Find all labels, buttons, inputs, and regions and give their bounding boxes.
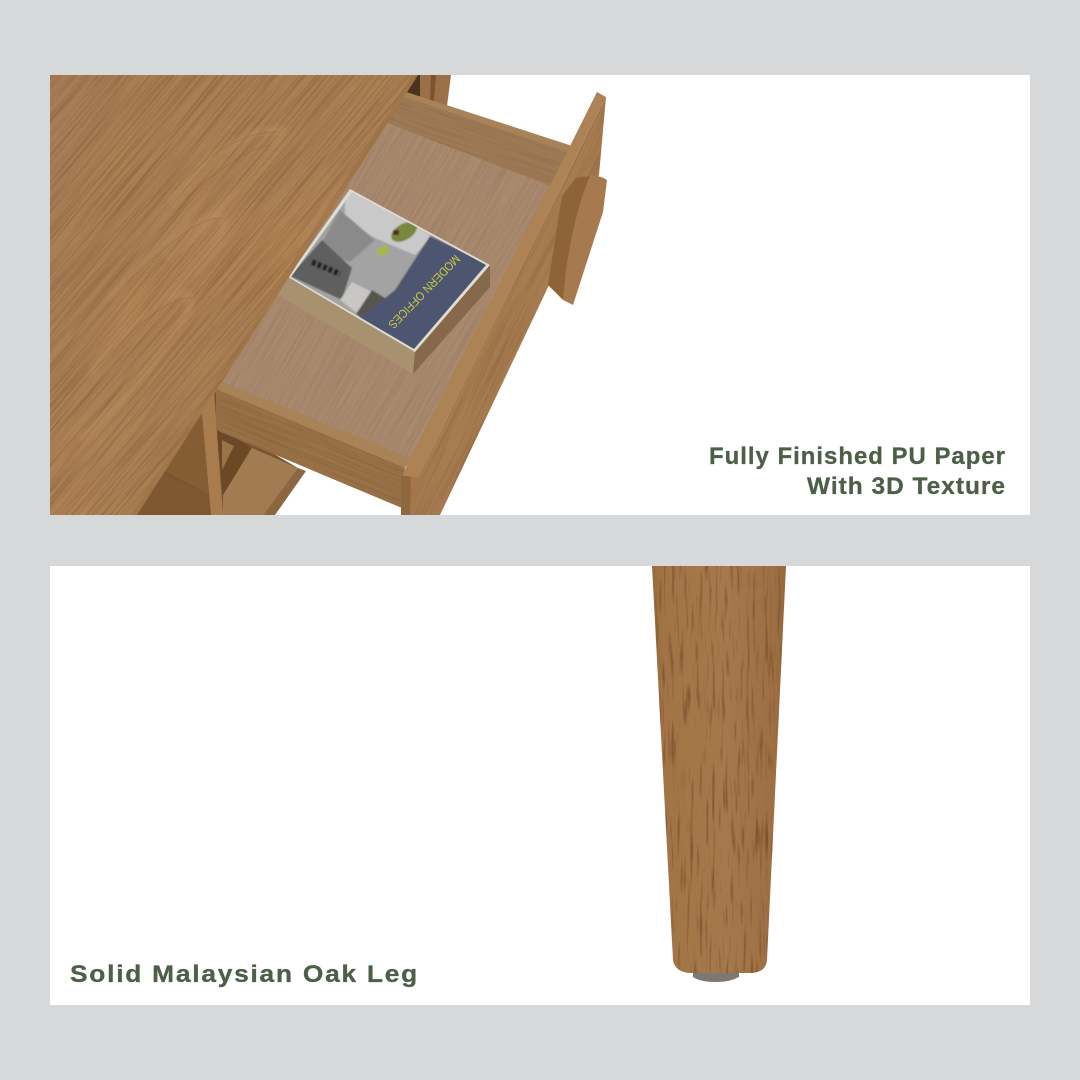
panel: solid oak leg [50, 566, 1030, 1005]
cathedral grain [80, 130, 285, 440]
drawer near side panel [216, 382, 410, 508]
caption: oak leg: Solid Malaysian Oak Leg [70, 961, 419, 988]
caption: PU paper: With 3D Texture [807, 473, 1006, 500]
book: Modern Offices [278, 185, 490, 374]
caption: PU paper [709, 443, 1006, 500]
desk top surface [50, 75, 418, 515]
drawer floor [222, 122, 550, 466]
book cover image [291, 192, 486, 349]
photo: open desk drawer [50, 75, 607, 515]
photo: tapered oak leg [650, 566, 788, 982]
rubber foot [693, 970, 739, 982]
book title: MODERN OFFICES [385, 252, 463, 331]
drawer handle [548, 176, 607, 305]
lower shelf and post under desk [137, 390, 306, 515]
drawer front panel [401, 92, 606, 515]
infographic canvas [50, 75, 1030, 1005]
rear desk leg [407, 75, 451, 106]
caption: PU paper: Fully Finished PU Paper [709, 443, 1006, 470]
panel: drawer and PU paper finish [50, 75, 1030, 515]
drawer back panel [388, 92, 570, 186]
leg body [650, 566, 788, 976]
